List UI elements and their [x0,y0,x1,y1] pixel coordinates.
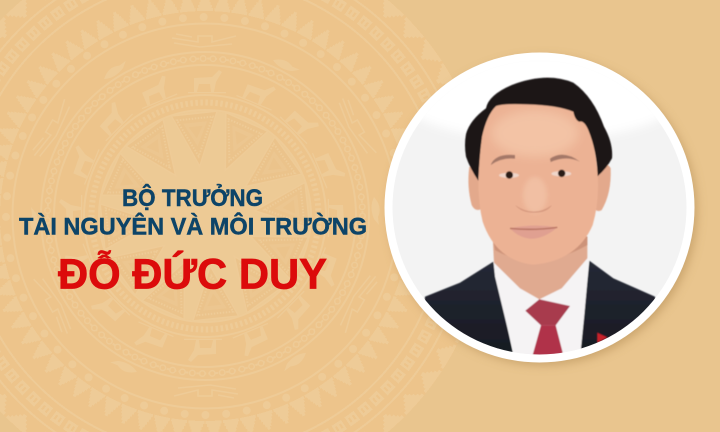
portrait photo [392,76,686,354]
central star panels [92,103,318,329]
tie [525,299,570,325]
face [478,103,598,264]
deer ring [59,70,351,362]
white ring [384,52,694,362]
bronze drum inner pattern [6,17,404,415]
eyebrows [491,155,515,165]
title: role line 2: TÀI NGUYÊN VÀ MÔI TRƯỜNG [19,212,367,240]
suit [424,260,656,354]
ears [468,167,481,210]
head [465,78,612,267]
title: role line 1: BỘ TRƯỞNG [122,183,263,212]
lapel pin [597,333,607,343]
shirt [492,260,590,354]
medallion shadow [389,57,697,365]
bronze drum outer rings and teeth [0,0,456,432]
boats ring [30,34,380,398]
title: minister name: ĐỖ ĐỨC DUY [58,249,327,298]
hair [465,78,612,181]
neck [493,237,587,299]
nose shadow [516,206,551,213]
mouth [510,226,557,239]
eyes [499,173,519,178]
portrait medallion [380,40,700,370]
